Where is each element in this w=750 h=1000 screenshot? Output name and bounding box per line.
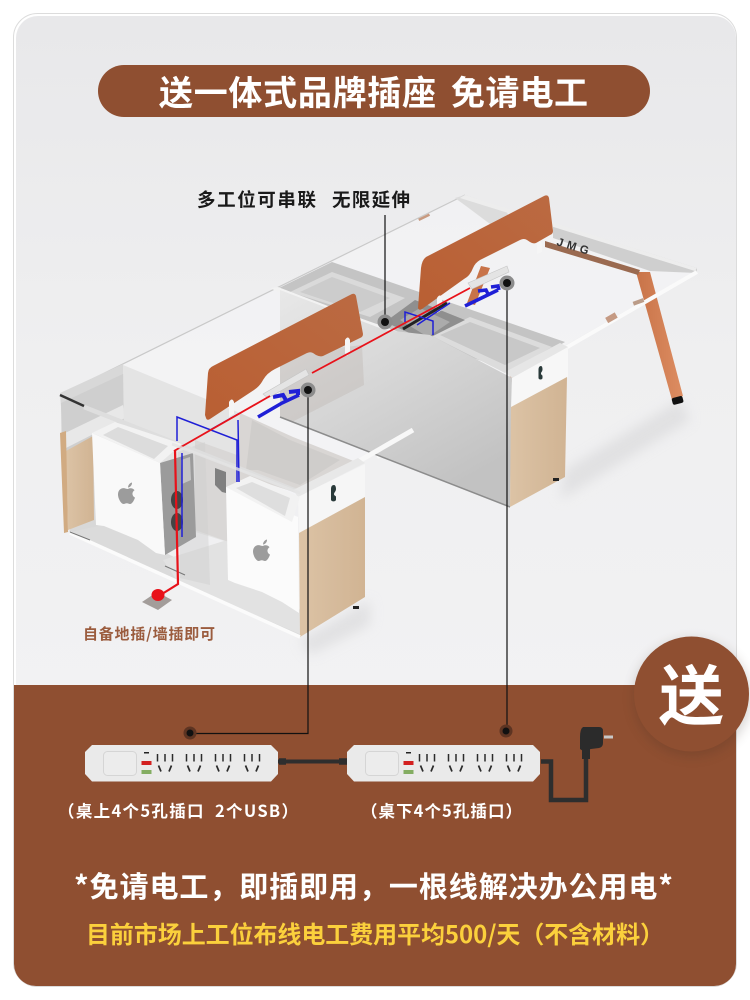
under-desk strip caption: （桌下4个5孔插口） [361,798,522,822]
leg foot [671,396,684,405]
apple logo [253,540,270,561]
tower side [160,453,196,555]
power strip: on desk [85,745,278,782]
outer left side [60,364,127,532]
right computer [215,468,300,613]
screen reflection on panel [280,345,364,422]
near bar over computers [172,444,300,493]
cabinet foot [553,478,559,481]
floor shadows [300,400,690,655]
cabinet foot [353,606,359,609]
screen clips [229,338,350,417]
desk illustration [60,195,697,655]
upper wedge [455,195,520,240]
brand mark: JMG [555,236,594,259]
rear desk frame and legs [377,195,697,457]
front cabinet unit [60,364,413,637]
tower top [226,476,300,522]
caption: chaining workstations [197,186,410,212]
rear-left dark detail [60,395,84,406]
central dark trunk cable [403,303,447,329]
main slogan: *免请电工，即插即用，一根线解决办公用电* [74,864,673,906]
left desk socket [263,369,309,398]
wood cabinet front [299,497,365,637]
red power line [162,288,470,594]
tower fans [171,491,183,509]
power plug [580,727,613,759]
floor socket plate [142,589,172,610]
right tray [235,413,356,494]
gift badge: 送 [659,644,724,738]
on-desk strip caption: （桌上4个5孔插口 2个USB） [58,798,298,822]
cabinet lock [538,366,542,380]
front leg [636,272,683,400]
title banner: 免请电工 [451,66,588,115]
title banner [98,65,650,117]
tower front [226,487,299,613]
cabinet lock [331,485,336,501]
right privacy screen [418,195,553,313]
near floor rail [70,533,300,637]
caption: chaining workstations: 多工位可串联 [197,186,316,212]
near glass edge strip [300,430,413,495]
title banner: 送一体式品牌插座 [159,66,436,115]
caption: chaining workstations: 无限延伸 [332,186,410,212]
right desk socket [468,266,509,289]
white cabinet band [298,464,365,533]
glass desktop [60,195,697,497]
underside beam [545,241,640,275]
big gray modesty panel [280,290,512,507]
apple logo [118,482,135,504]
tray tops [277,262,565,372]
callout: on-desk socket leader [184,382,316,740]
callout: middle connection point [378,215,392,330]
near front bar [84,407,299,492]
translucent divider [178,442,210,585]
floor [68,520,300,636]
tower front [92,433,165,555]
rear wall behind computers [123,365,240,545]
screen clips [437,242,542,313]
rear cabinet unit [270,262,568,507]
left computer [92,422,196,555]
brown lower panel [14,685,736,986]
gift badge [634,636,750,756]
near edge of the glass [377,272,697,457]
blue under-desk wiring [177,286,499,537]
power strip cables [278,755,586,800]
floor socket caption: 自备地插/墙插即可 [83,623,215,644]
left privacy screen [205,294,363,420]
tower top [92,422,182,463]
callout: under-desk socket leader [500,276,514,738]
power strip: under desk [347,745,540,782]
rear leg [467,266,490,305]
white cabinet band [511,347,568,408]
wood cabinet front [510,377,567,507]
upper beam [553,223,697,273]
cost note: 目前市场上工位布线电工费用平均500/天（不含材料） [86,915,664,950]
small rear unit detail [215,468,226,493]
